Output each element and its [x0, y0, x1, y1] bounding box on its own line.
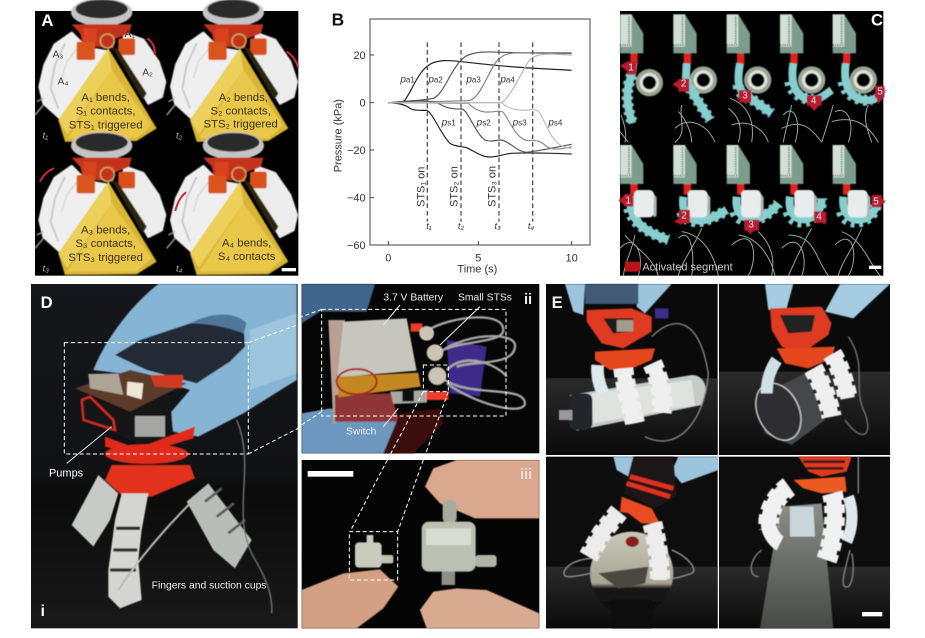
D fingers label: Fingers and suction cups	[152, 581, 266, 592]
A finger labels	[53, 29, 153, 87]
D ii numeral: ii	[524, 292, 532, 308]
A captions on the pyramid: A₄ bends,	[222, 238, 271, 250]
D ii photo shapes	[302, 284, 525, 453]
A time labels: t₂	[176, 130, 183, 140]
A finger labels: A₃	[53, 50, 63, 61]
B pressure curves	[388, 52, 572, 157]
C segment numbers: 2	[681, 78, 687, 89]
B STS on labels	[415, 166, 499, 207]
D iii scale bar	[308, 471, 353, 477]
B t labels: t₄	[528, 221, 534, 231]
C segment numbers: 4	[811, 96, 817, 107]
B t labels: t₂	[458, 221, 465, 231]
B curve labels: ps4	[547, 118, 563, 129]
B y tick labels: −20	[347, 145, 366, 157]
A captions on the pyramid: STS₃ triggered	[68, 252, 143, 264]
D zoom dashed frame	[64, 324, 300, 454]
D iii numeral: iii	[520, 467, 532, 483]
B STS on labels: STS₁ on	[415, 167, 427, 207]
A captions on the pyramid	[68, 92, 278, 264]
B axes and ticks	[370, 19, 590, 245]
D photo shapes: glove, electronics, fingers	[72, 284, 297, 613]
panel D: photo of untethered gripper held in a gloved hand	[31, 284, 300, 628]
B x tick labels: 10	[566, 253, 578, 265]
A captions on the pyramid: STS₂ triggered	[204, 119, 278, 131]
D sub-panel numeral: i	[41, 603, 45, 620]
B x tick labels: 5	[475, 253, 481, 265]
B panel letter: B	[332, 10, 344, 30]
C segment numbers: 1	[628, 63, 634, 74]
B x tick labels	[385, 253, 578, 265]
A time labels: t₁	[43, 130, 48, 140]
B y tick labels: 0	[360, 98, 366, 110]
C segment numbers: 2	[681, 210, 687, 221]
A finger labels: A₁	[125, 29, 135, 40]
A panel letter: A	[41, 11, 53, 30]
C segment numbers: 4	[816, 212, 822, 223]
C top row: ring sequence	[620, 14, 883, 123]
C bottom row: box sequence	[620, 145, 877, 240]
E tile: metal sphere	[546, 457, 718, 628]
C panel letter: C	[871, 11, 883, 30]
E tile: tall plastic cup	[719, 457, 890, 628]
A finger labels: A₄	[58, 76, 68, 87]
A finger labels: A₂	[142, 68, 153, 79]
B y tick labels: −40	[347, 193, 366, 205]
B STS on labels: STS₂ on	[449, 166, 461, 207]
D ii leader lines	[383, 305, 480, 427]
D ii switch label: Switch	[346, 427, 377, 438]
panel E: gripper holding four objects	[546, 284, 890, 628]
B curve labels: ps3	[512, 118, 527, 129]
D ii battery label: 3.7 V Battery	[383, 292, 444, 303]
B y tick labels	[347, 50, 366, 252]
C segment numbers: 3	[748, 220, 754, 231]
D pumps leader line	[67, 427, 112, 463]
D iii photo shapes	[302, 460, 539, 628]
E tile: beaker	[719, 284, 890, 455]
B curve labels: pa1	[399, 74, 415, 85]
panel B: pressure versus time chart	[332, 10, 590, 275]
A captions on the pyramid: S₁ contacts,	[76, 105, 136, 117]
C legend: Activated segment	[642, 261, 733, 273]
A captions on the pyramid: STS₁ triggered	[69, 119, 143, 131]
C segment numbers: 5	[873, 196, 879, 207]
A photo tiles: gripper and yellow pyramid at t1 to t4	[35, 0, 297, 275]
C segment numbers: 1	[626, 196, 632, 207]
panel D ii: close-up of battery and small STSs	[300, 284, 539, 460]
A captions on the pyramid: A₂ bends,	[219, 92, 268, 104]
B curve labels: pa3	[465, 74, 481, 85]
B curve labels: ps2	[476, 118, 491, 129]
A captions on the pyramid: A₃ bends,	[81, 225, 130, 237]
C tubes	[620, 98, 880, 276]
B x tick labels: 0	[385, 253, 391, 265]
C segment numbers: 3	[742, 90, 748, 101]
panel D iii: fingers holding small and large suction trigger switches	[302, 460, 539, 628]
B y axis title: Pressure (kPa)	[333, 99, 345, 172]
A captions on the pyramid: S₄ contacts	[218, 251, 276, 263]
C segment numbers: 5	[877, 86, 883, 97]
A red motion arrows	[40, 38, 298, 211]
D pumps label: Pumps	[49, 467, 84, 479]
A time labels	[43, 130, 183, 274]
B curve labels: ps1	[441, 118, 456, 129]
D ii dashed frames	[300, 309, 506, 460]
B curve labels	[399, 74, 563, 129]
E tile: syringe	[546, 284, 718, 455]
B dashed time markers	[427, 42, 533, 222]
B curve labels: pa2	[427, 74, 443, 85]
C activated red segments	[618, 62, 886, 234]
B STS on labels: STS₃ on	[487, 166, 499, 207]
B curve labels: pa4	[499, 74, 515, 85]
A time labels: t₃	[43, 264, 49, 274]
panel C: finger wrapping sequence around a ring and a box	[618, 11, 886, 276]
A captions on the pyramid: S₃ contacts,	[75, 238, 136, 250]
B x axis title: Time (s)	[457, 263, 497, 275]
B t labels: t₁	[426, 221, 432, 231]
A captions on the pyramid: A₁ bends,	[81, 92, 130, 104]
C scale bar	[869, 266, 881, 269]
E panel letter: E	[552, 293, 563, 312]
A time labels: t₄	[176, 264, 183, 274]
D iii dashed frames	[349, 460, 423, 580]
B t labels	[426, 221, 534, 231]
panel A: four time-step photos gripping a yellow pyramid	[35, 0, 298, 276]
A captions on the pyramid: S₂ contacts,	[210, 105, 271, 117]
B y tick labels: 20	[353, 50, 366, 62]
D ii STS label: Small STSs	[458, 292, 512, 303]
B y tick labels: −60	[347, 240, 366, 252]
B t labels: t₃	[495, 221, 501, 231]
C segment numbers	[626, 63, 883, 231]
E scale bar	[862, 612, 882, 616]
A scale bar	[282, 268, 296, 271]
D panel letter: D	[41, 293, 53, 312]
